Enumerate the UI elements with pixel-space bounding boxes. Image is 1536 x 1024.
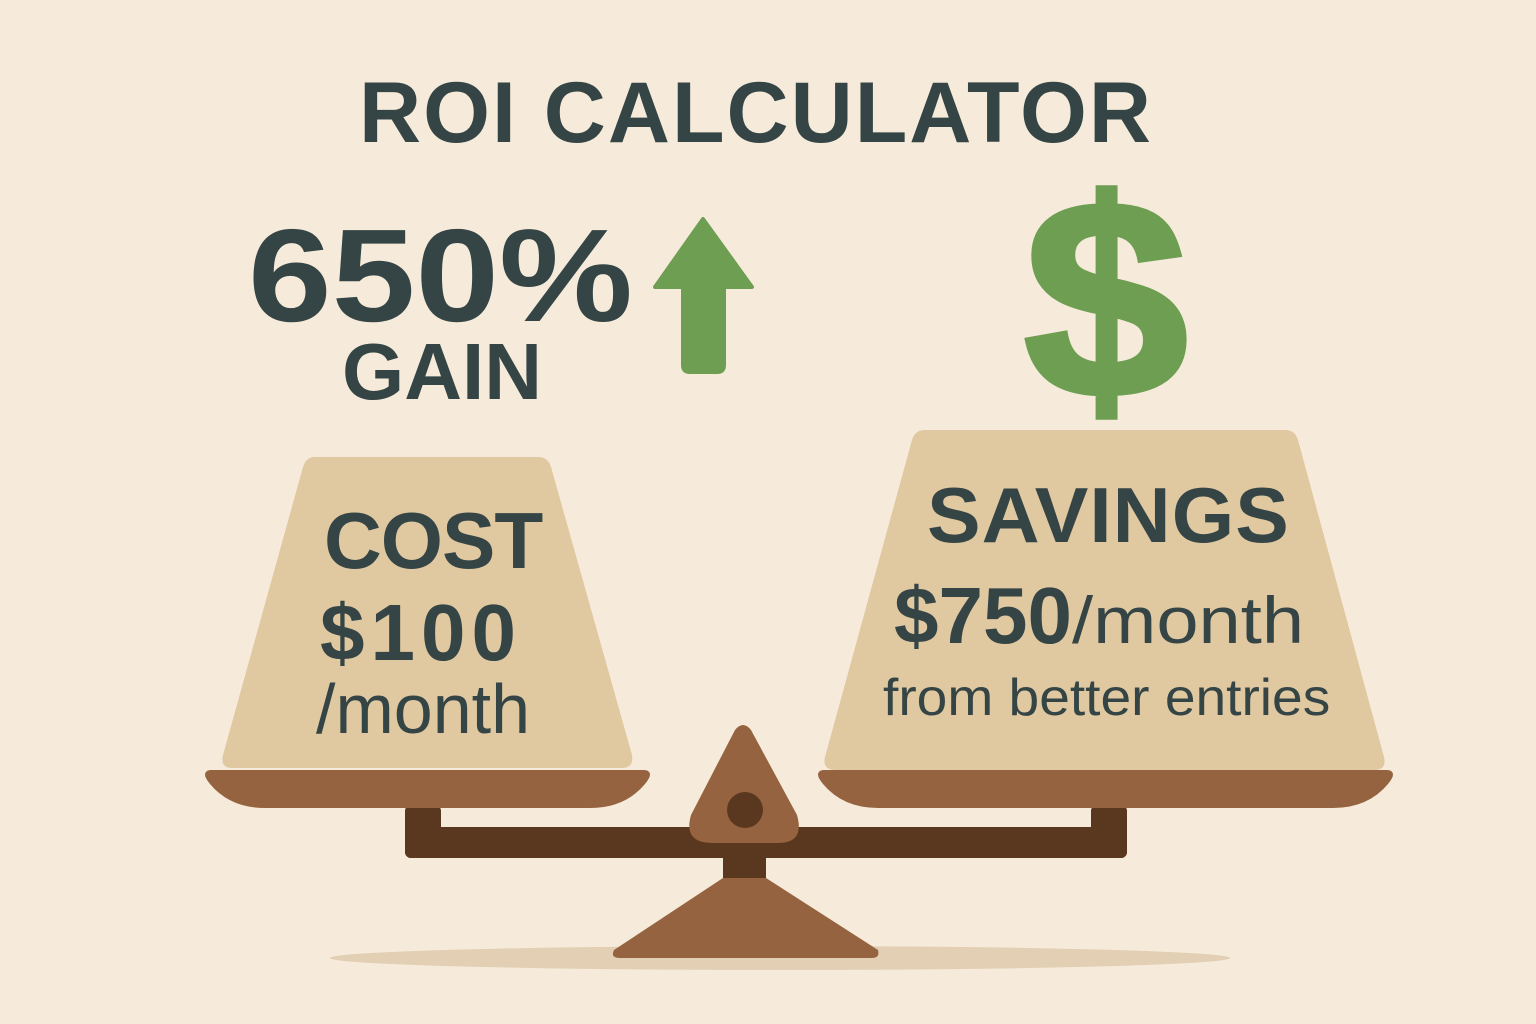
stat: 650% gain	[248, 202, 633, 416]
cost text: /month	[316, 670, 530, 748]
left pan	[205, 770, 650, 808]
shadow	[330, 946, 1230, 970]
icon: up arrow	[653, 216, 754, 374]
stat number: 650%	[248, 202, 633, 349]
cost text	[316, 496, 542, 748]
stat label: GAIN	[342, 327, 542, 416]
savings text: SAVINGS	[927, 471, 1290, 559]
base	[613, 878, 878, 958]
left weight	[222, 457, 632, 768]
fulcrum	[689, 725, 799, 843]
icon: dollar sign: $	[1024, 144, 1188, 456]
title: ROI CALCULATOR	[359, 65, 1153, 161]
savings text: $750	[894, 571, 1072, 660]
right pan	[818, 770, 1393, 808]
cost text: COST	[324, 496, 542, 585]
savings text	[883, 471, 1330, 727]
beam	[405, 805, 1127, 880]
right weight	[824, 430, 1385, 770]
savings text: /month	[1072, 583, 1304, 657]
cost text: $100	[320, 588, 522, 677]
savings text: from better entries	[883, 669, 1330, 727]
